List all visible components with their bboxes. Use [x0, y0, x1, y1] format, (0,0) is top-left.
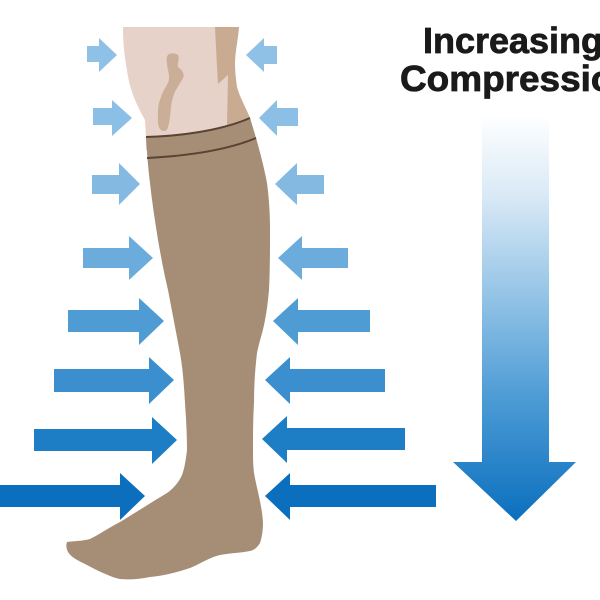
right arrow 2 — [259, 100, 298, 136]
leg illustration — [66, 27, 270, 579]
right arrow 7 — [262, 416, 405, 463]
left arrow 8 — [0, 473, 145, 520]
varicose vein — [158, 53, 184, 131]
left arrow 7 — [34, 417, 177, 464]
heading: Increasing Compression — [400, 20, 600, 99]
right arrow 1 — [246, 38, 277, 72]
heading: Increasing Compression: Increasing — [423, 20, 600, 61]
left arrow 4 — [83, 236, 153, 280]
large gradient downward arrow — [453, 115, 576, 521]
right arrow 6 — [265, 357, 385, 404]
left arrow 1 — [87, 38, 117, 72]
compression stocking — [66, 118, 270, 579]
thigh shadow — [215, 27, 250, 125]
left arrow 3 — [92, 163, 140, 205]
right arrow 5 — [273, 298, 370, 345]
right arrow 3 — [275, 163, 324, 205]
left arrow 2 — [93, 100, 132, 136]
left arrow 6 — [54, 357, 174, 404]
right arrow 8 — [265, 473, 436, 520]
left arrows pointing inward — [0, 38, 177, 520]
right arrows pointing inward — [246, 38, 436, 520]
right arrow 4 — [278, 236, 348, 280]
left arrow 5 — [68, 298, 164, 345]
stocking band lines — [146, 118, 256, 158]
bare thigh skin — [123, 27, 256, 150]
